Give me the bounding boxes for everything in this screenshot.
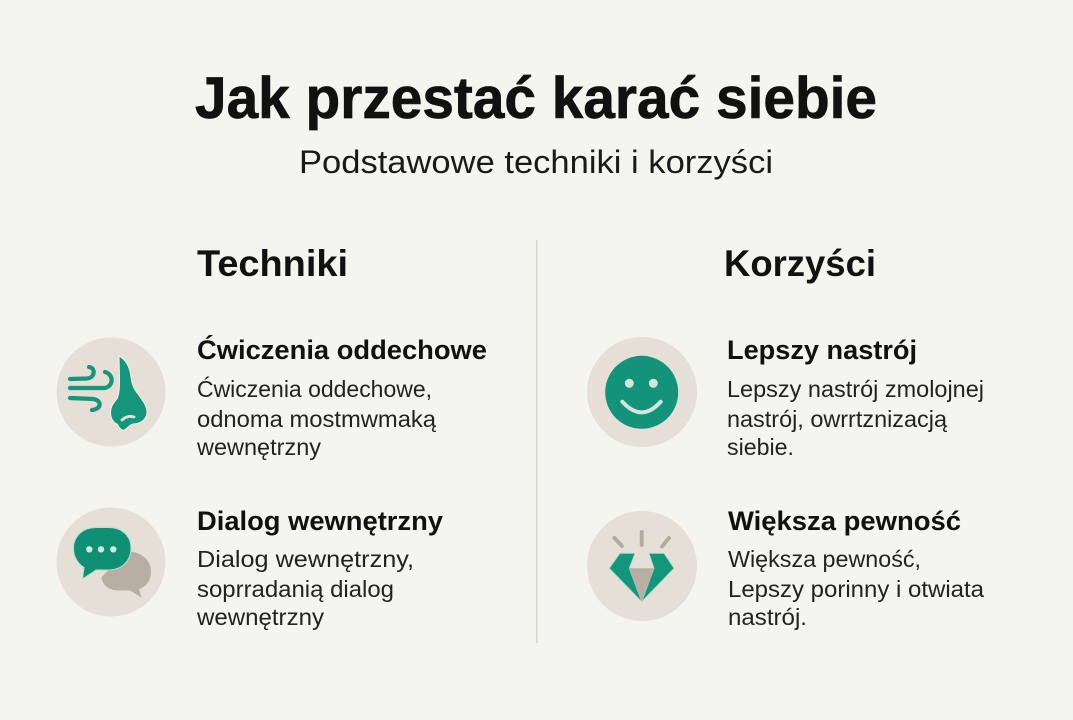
item text xyxy=(196,376,436,460)
item heading: Dialog wewnętrzny xyxy=(197,506,443,536)
item: ćwiczenia oddechowe xyxy=(56,334,487,460)
subtitle: Podstawowe techniki i korzyści xyxy=(299,144,773,180)
panel: korzyści xyxy=(587,243,984,630)
item text: wewnętrzny xyxy=(196,604,325,630)
item text: nastrój, owrrtznizacją xyxy=(727,406,947,432)
item heading: Lepszy nastrój xyxy=(727,335,917,365)
item text: Ćwiczenia oddechowe, xyxy=(197,376,432,402)
title: Jak przestać karać siebie xyxy=(195,66,877,131)
item text: siebie. xyxy=(727,434,794,460)
item text xyxy=(196,546,414,630)
item: dialog wewnętrzny xyxy=(56,506,443,630)
item text: wewnętrzny xyxy=(196,434,322,460)
item: większa pewność xyxy=(587,506,984,630)
item heading: Większa pewność xyxy=(728,506,961,536)
item text: nastrój. xyxy=(728,604,807,630)
item text: Większa pewność, xyxy=(728,546,921,572)
item text xyxy=(727,376,984,460)
item heading: Ćwiczenia oddechowe xyxy=(197,334,487,365)
heading: Korzyści: Korzyści xyxy=(724,243,876,284)
item text xyxy=(728,546,984,630)
icon: nose and breath xyxy=(56,338,166,446)
item text: Lepszy nastrój zmolojnej xyxy=(727,376,984,402)
item: lepszy nastrój xyxy=(587,335,984,460)
item text: soprradanią dialog xyxy=(197,576,394,602)
icon: smiley face xyxy=(587,337,697,447)
item text: Dialog wewnętrzny, xyxy=(197,546,414,572)
item text: odnoma mostmwmaką xyxy=(197,406,436,432)
panel: techniki xyxy=(56,243,487,630)
icon: diamond xyxy=(587,511,697,621)
item text: Lepszy porinny i otwiata xyxy=(728,576,984,602)
heading: Techniki: Techniki xyxy=(197,243,348,284)
icon: speech bubbles xyxy=(56,508,166,616)
